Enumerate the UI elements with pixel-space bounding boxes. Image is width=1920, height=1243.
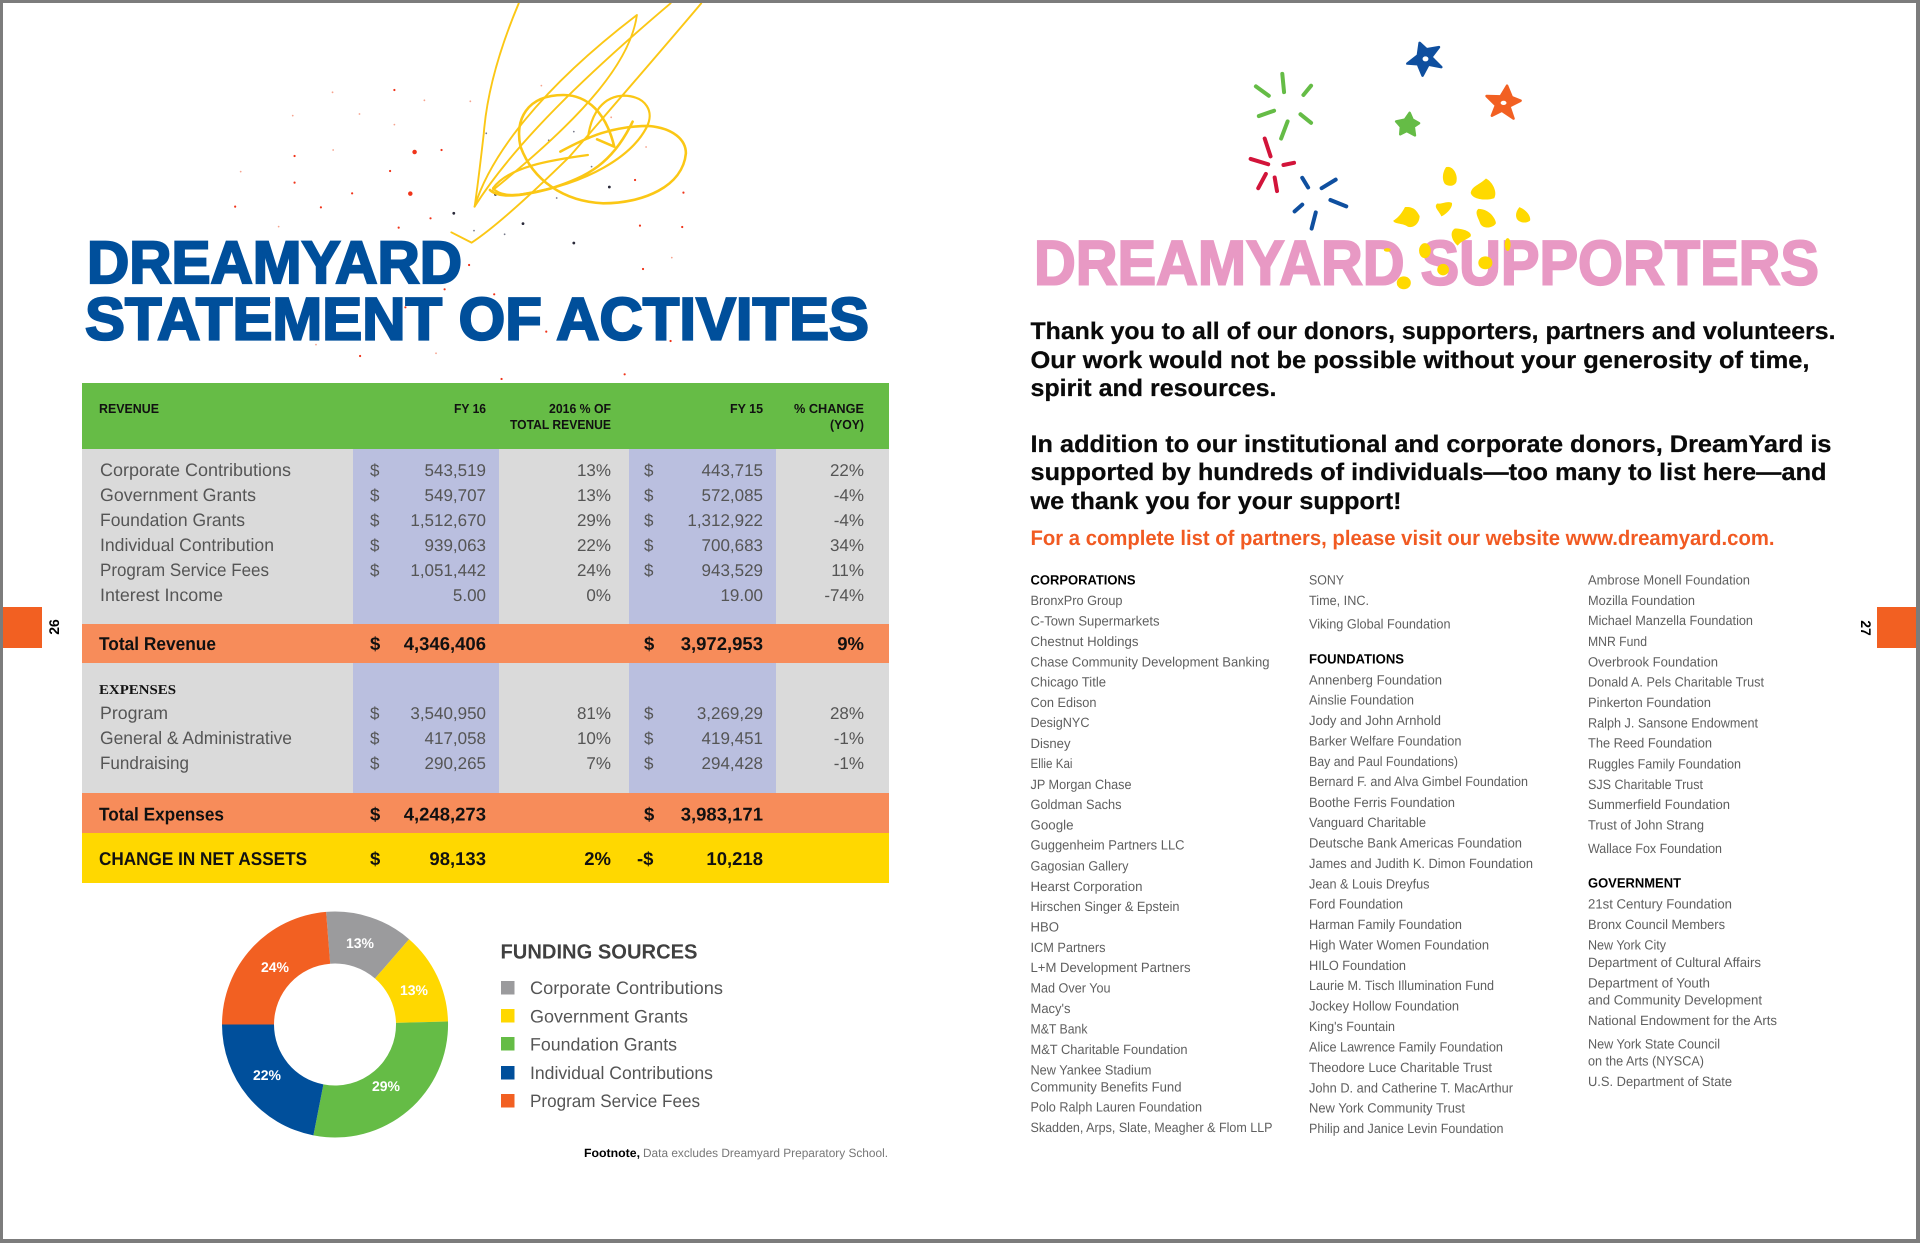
supporter list: corporations continued and foundations: Vanguard Charitable [1309, 815, 1426, 830]
supporter list: corporations: BronxPro Group [1030, 593, 1122, 608]
text block: individual supporters message: In addition to our institutional and corporate donors, DreamYard is [1030, 431, 1832, 458]
supporter list: corporations: Community Benefits Fund [1030, 1080, 1182, 1094]
change in net assets row: 2% [584, 848, 611, 869]
supporter list: corporations: M&T Bank [1030, 1021, 1088, 1036]
expenses rows: -1% [834, 729, 864, 748]
revenue rows: 700,683 [702, 536, 763, 555]
supporter list: corporations: Polo Ralph Lauren Foundation [1030, 1100, 1202, 1115]
supporter list: corporations continued and foundations: Jean & Louis Dreyfus [1309, 876, 1430, 891]
revenue rows: -4% [834, 486, 864, 505]
revenue rows: 0% [586, 586, 611, 605]
revenue rows: $ [644, 536, 654, 555]
revenue rows: Foundation Grants [100, 510, 245, 530]
expenses rows: Program [100, 703, 168, 723]
supporter list: foundations continued and government: Pinkerton Foundation [1588, 695, 1711, 710]
supporter list: corporations continued and foundations: James and Judith K. Dimon Foundation [1309, 856, 1533, 871]
donut chart: funding sources: 13% [400, 982, 429, 998]
expenses rows: $ [644, 754, 654, 773]
revenue rows: -4% [834, 511, 864, 530]
total expenses row: 3,983,171 [681, 804, 763, 824]
supporter list: corporations continued and foundations: Deutsche Bank Americas Foundation [1309, 836, 1522, 851]
donut chart: funding sources: 13% [346, 935, 375, 951]
table header row: 2016 % OF [549, 401, 611, 416]
heading: statement of activites [85, 229, 869, 352]
supporter list: foundations continued and government: Ralph J. Sansone Endowment [1588, 715, 1758, 730]
expenses rows: 3,540,950 [410, 704, 486, 723]
supporter list: corporations continued and foundations: HILO Foundation [1309, 958, 1406, 973]
supporter list: corporations continued and foundations: Harman Family Foundation [1309, 917, 1462, 932]
supporter list: foundations continued and government [1588, 572, 1777, 1089]
icon: orange star [1487, 86, 1521, 119]
total revenue row [99, 633, 864, 654]
supporter list: corporations: Disney [1030, 736, 1071, 751]
text block: thank you message [1030, 318, 1836, 402]
expenses rows: Fundraising [100, 753, 189, 773]
supporter list: corporations continued and foundations [1309, 572, 1533, 1136]
supporter list: corporations: ICM Partners [1030, 940, 1106, 955]
revenue rows: 1,312,922 [687, 511, 763, 530]
expenses rows: $ [370, 754, 380, 773]
revenue rows: $ [644, 486, 654, 505]
supporter list: foundations continued and government: Ambrose Monell Foundation [1588, 572, 1750, 588]
revenue rows: $ [644, 461, 654, 480]
revenue rows: 549,707 [425, 486, 486, 505]
expenses rows: -1% [834, 754, 864, 773]
revenue rows: Individual Contribution [100, 535, 274, 555]
legend: funding sources: Program Service Fees [530, 1091, 700, 1111]
revenue rows: 13% [577, 486, 611, 505]
supporter list: corporations continued and foundations: Time, INC. [1309, 593, 1369, 608]
total revenue row: $ [370, 633, 381, 654]
supporter list: corporations: Hearst Corporation [1030, 879, 1142, 894]
supporter list: foundations continued and government: GOVERNMENT [1588, 876, 1682, 891]
supporter list: corporations: Chicago Title [1030, 675, 1106, 690]
footnote: Footnote, [584, 1146, 640, 1160]
total revenue row: 9% [837, 633, 864, 654]
legend: funding sources: FUNDING SOURCES [500, 940, 698, 964]
supporter list: foundations continued and government: Bronx Council Members [1588, 917, 1725, 932]
supporter list: foundations continued and government: Mozilla Foundation [1588, 593, 1695, 608]
icon: green star [1396, 113, 1419, 135]
revenue rows: Government Grants [100, 485, 256, 505]
text block: thank you message: spirit and resources. [1030, 375, 1276, 402]
expenses rows: $ [370, 704, 380, 723]
change in net assets row: $ [370, 848, 381, 869]
supporter list: corporations continued and foundations: Viking Global Foundation [1309, 616, 1450, 631]
supporter list: corporations: Chase Community Development Banking [1030, 654, 1270, 669]
expenses rows: $ [370, 729, 380, 748]
icon: red burst [1251, 139, 1294, 191]
supporter list: corporations: C-Town Supermarkets [1030, 613, 1160, 628]
change in net assets row: 98,133 [429, 848, 486, 869]
donut chart: funding sources [222, 912, 448, 1137]
table header row: FY 16 [454, 401, 486, 416]
supporter list: corporations continued and foundations: FOUNDATIONS [1309, 652, 1404, 667]
icon: blue star [1407, 43, 1441, 76]
expenses rows: 290,265 [425, 754, 486, 773]
icon: green burst [1256, 74, 1311, 139]
supporter list: foundations continued and government: National Endowment for the Arts [1588, 1013, 1777, 1028]
supporter list: corporations continued and foundations: High Water Women Foundation [1309, 938, 1489, 952]
revenue rows: $ [370, 561, 380, 580]
supporter list: corporations: DesigNYC [1030, 715, 1090, 730]
expenses rows: 417,058 [425, 729, 486, 748]
expenses rows: 10% [577, 729, 611, 748]
supporter list: foundations continued and government: New York City [1588, 938, 1666, 952]
supporter list: corporations continued and foundations: Alice Lawrence Family Foundation [1309, 1040, 1503, 1055]
supporter list: corporations continued and foundations: SONY [1309, 572, 1344, 587]
legend: funding sources: Foundation Grants [530, 1034, 677, 1054]
total expenses row: $ [370, 804, 381, 824]
total expenses row: Total Expenses [99, 804, 224, 824]
revenue rows: 572,085 [702, 486, 763, 505]
legend: funding sources: Individual Contributions [530, 1063, 713, 1083]
supporter list: corporations: Macy's [1030, 1001, 1071, 1016]
table header row [99, 401, 864, 432]
revenue rows: $ [644, 561, 654, 580]
supporter list: corporations: Con Edison [1030, 695, 1096, 710]
supporter list: foundations continued and government: MNR Fund [1588, 634, 1647, 649]
revenue rows [100, 460, 864, 605]
expenses rows: EXPENSES [99, 682, 176, 697]
expenses rows: 294,428 [702, 754, 763, 773]
revenue rows: 443,715 [702, 461, 763, 480]
revenue rows: $ [370, 461, 380, 480]
supporter list: corporations continued and foundations: Ainslie Foundation [1309, 693, 1414, 708]
donut chart: funding sources: 24% [261, 959, 290, 975]
revenue rows: Corporate Contributions [100, 460, 291, 480]
supporter list: corporations: Mad Over You [1030, 980, 1110, 995]
supporter list: foundations continued and government: Summerfield Foundation [1588, 797, 1730, 812]
table header row: TOTAL REVENUE [510, 417, 611, 432]
supporter list: foundations continued and government: Overbrook Foundation [1588, 654, 1718, 669]
supporter list: foundations continued and government: and Community Development [1588, 992, 1762, 1008]
legend: funding sources [500, 940, 723, 1111]
revenue rows: 34% [830, 536, 864, 555]
legend: funding sources: Government Grants [530, 1006, 688, 1026]
supporter list: foundations continued and government: Ruggles Family Foundation [1588, 756, 1741, 771]
illustration: stars and fireworks [1251, 43, 1521, 229]
revenue rows: $ [370, 536, 380, 555]
change in net assets row: -$ [637, 848, 654, 869]
revenue rows: 22% [830, 461, 864, 480]
supporter list: corporations continued and foundations: Bernard F. and Alva Gimbel Foundation [1309, 774, 1528, 789]
supporter list: corporations continued and foundations: John D. and Catherine T. MacArthur [1309, 1081, 1513, 1096]
total revenue row: 4,346,406 [404, 633, 486, 654]
revenue rows: 1,512,670 [410, 511, 486, 530]
revenue rows: $ [644, 511, 654, 530]
total expenses row [99, 804, 763, 824]
supporter list: corporations continued and foundations: Jody and John Arnhold [1309, 713, 1441, 728]
change in net assets row: CHANGE IN NET ASSETS [99, 848, 307, 869]
supporter list: corporations: Guggenheim Partners LLC [1030, 838, 1185, 853]
supporter list: corporations: Goldman Sachs [1030, 797, 1122, 812]
revenue rows: 543,519 [425, 461, 486, 480]
page tab and number 26: 26 [46, 619, 62, 635]
text block: individual supporters message [1029, 431, 1832, 515]
supporter list: corporations continued and foundations: Ford Foundation [1309, 896, 1403, 912]
change in net assets row [99, 848, 763, 869]
supporter list: foundations continued and government: Wallace Fox Foundation [1588, 841, 1722, 856]
total revenue row: $ [644, 633, 655, 654]
table: revenue and expenses [82, 383, 889, 883]
supporter list: foundations continued and government: New York State Council [1588, 1036, 1720, 1051]
heading: statement of activites: DREAMYARD [87, 229, 462, 296]
supporter list: foundations continued and government: U.S. Department of State [1588, 1074, 1732, 1089]
supporter list: corporations: HBO [1030, 920, 1059, 934]
expenses rows: 3,269,29 [697, 704, 763, 723]
revenue rows: Program Service Fees [100, 560, 269, 580]
supporter list: corporations: JP Morgan Chase [1030, 777, 1132, 792]
expenses rows [99, 682, 864, 773]
text block: individual supporters message: supported by hundreds of individuals—too many to list here—and [1030, 459, 1826, 486]
supporter list: corporations continued and foundations: Barker Welfare Foundation [1309, 734, 1462, 748]
supporter list: corporations: Hirschen Singer & Epstein [1030, 899, 1180, 914]
supporter list: foundations continued and government: Donald A. Pels Charitable Trust [1588, 675, 1764, 690]
text block: website callout: For a complete list of partners, please visit our website www.dreamyard.com. [1030, 527, 1774, 550]
supporter list: foundations continued and government: 21st Century Foundation [1588, 896, 1732, 911]
revenue rows: 13% [577, 461, 611, 480]
supporter list: foundations continued and government: SJS Charitable Trust [1588, 777, 1703, 792]
supporter list: corporations: Chestnut Holdings [1030, 634, 1139, 649]
revenue rows: 22% [577, 536, 611, 555]
supporter list: corporations continued and foundations: King's Fountain [1309, 1019, 1395, 1034]
expenses rows: 28% [830, 704, 864, 723]
revenue rows: $ [370, 511, 380, 530]
total revenue row: 3,972,953 [681, 633, 763, 654]
total expenses row: $ [644, 804, 655, 824]
revenue rows: -74% [824, 586, 864, 605]
supporter list: corporations continued and foundations: Annenberg Foundation [1309, 672, 1442, 687]
revenue rows: Interest Income [100, 585, 223, 605]
table header row: % CHANGE [794, 401, 864, 416]
expenses rows: General & Administrative [100, 728, 292, 748]
text block: thank you message: Thank you to all of our donors, supporters, partners and volunteers. [1030, 318, 1836, 345]
supporter list: corporations: Google [1030, 817, 1074, 832]
supporter list: corporations: Gagosian Gallery [1030, 858, 1129, 873]
supporter list: corporations: Ellie Kai [1030, 756, 1072, 771]
supporter list: corporations continued and foundations: Theodore Luce Charitable Trust [1309, 1060, 1492, 1075]
supporter list: foundations continued and government: Trust of John Strang [1588, 818, 1704, 832]
change in net assets row: 10,218 [706, 848, 763, 869]
text block: individual supporters message: we thank you for your support! [1029, 488, 1402, 515]
expenses rows: $ [644, 704, 654, 723]
expenses rows: 81% [577, 704, 611, 723]
revenue rows: $ [370, 486, 380, 505]
table header row: (YOY) [830, 417, 864, 432]
supporter list: corporations: Skadden, Arps, Slate, Meagher & Flom LLP [1030, 1120, 1272, 1135]
total expenses row: 4,248,273 [404, 804, 486, 824]
donut chart: funding sources: 22% [253, 1067, 282, 1083]
illustration: yellow confetti blobs [1384, 167, 1530, 289]
expenses rows: $ [644, 729, 654, 748]
heading: dreamyard supporters: DREAMYARD SUPPORTERS [1034, 228, 1819, 298]
supporter list: corporations: CORPORATIONS [1030, 572, 1136, 587]
supporter list: foundations continued and government: Department of Cultural Affairs [1588, 955, 1761, 970]
supporter list: foundations continued and government: Michael Manzella Foundation [1588, 613, 1753, 628]
revenue rows: 24% [577, 561, 611, 580]
supporter list: corporations continued and foundations: Bay and Paul Foundations) [1309, 754, 1458, 769]
supporter list: corporations continued and foundations: Jockey Hollow Foundation [1309, 999, 1459, 1014]
supporter list: corporations continued and foundations: Laurie M. Tisch Illumination Fund [1309, 978, 1494, 993]
revenue rows: 1,051,442 [410, 561, 486, 580]
footnote: Data excludes Dreamyard Preparatory School. [643, 1146, 888, 1160]
page tab and number 26 [3, 607, 62, 648]
supporter list: corporations continued and foundations: Philip and Janice Levin Foundation [1309, 1121, 1504, 1136]
heading: statement of activites: STATEMENT OF ACTIVITES [85, 286, 869, 352]
supporter list: corporations: New Yankee Stadium [1030, 1062, 1152, 1077]
supporter list: corporations: M&T Charitable Foundation [1030, 1042, 1188, 1057]
revenue rows: 29% [577, 511, 611, 530]
supporter list: corporations continued and foundations: New York Community Trust [1309, 1100, 1465, 1116]
expenses rows: 419,451 [702, 729, 763, 748]
legend: funding sources: Corporate Contributions [530, 978, 723, 998]
expenses rows: 7% [586, 754, 611, 773]
donut chart: funding sources: 29% [372, 1078, 401, 1094]
supporter list: corporations continued and foundations: Boothe Ferris Foundation [1309, 795, 1455, 810]
text block: thank you message: Our work would not be possible without your generosity of time, [1030, 347, 1810, 374]
illustration: confetti dots and yellow scribble [235, 3, 701, 379]
supporter list: corporations: L+M Development Partners [1030, 960, 1191, 975]
table header row: REVENUE [99, 401, 159, 416]
supporter list: corporations [1030, 572, 1272, 1135]
revenue rows: 5.00 [453, 586, 486, 605]
page tab and number 27: 27 [1858, 620, 1874, 636]
page tab and number 27 [1858, 607, 1916, 648]
revenue rows: 943,529 [702, 561, 763, 580]
table background bands [82, 383, 889, 883]
revenue rows: 939,063 [425, 536, 486, 555]
revenue rows: 11% [831, 561, 864, 580]
supporter list: foundations continued and government: Department of Youth [1588, 975, 1710, 990]
icon: blue burst [1295, 178, 1346, 229]
supporter list: foundations continued and government: The Reed Foundation [1588, 736, 1712, 751]
total revenue row: Total Revenue [99, 633, 216, 654]
revenue rows: 19.00 [720, 586, 763, 605]
supporter list: foundations continued and government: on the Arts (NYSCA) [1588, 1054, 1704, 1069]
table header row: FY 15 [730, 401, 763, 416]
